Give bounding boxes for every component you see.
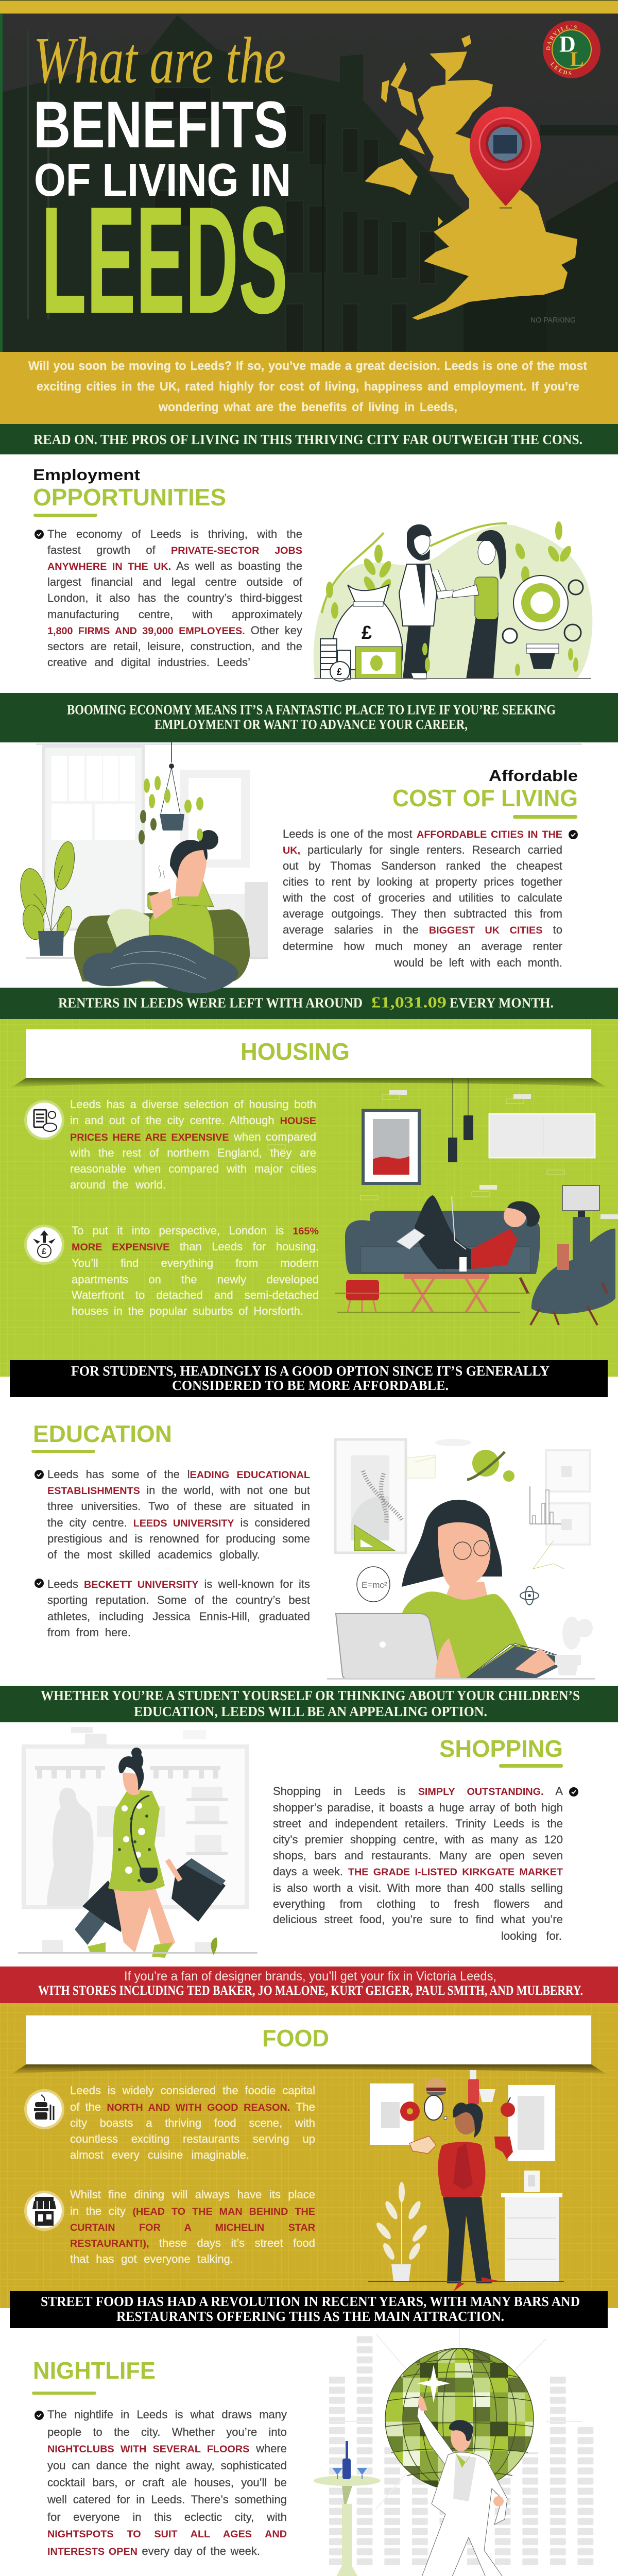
text block: education 1: of the most skilled academics globally. [47, 1548, 260, 1561]
text block: employment: London, it also has the country’s third-biggest [47, 591, 302, 604]
illustration: handshake with money and light bulb [314, 521, 592, 681]
icon: check bullet [35, 1470, 44, 1479]
text block: shopping [273, 1785, 563, 1942]
banner: renters: £1,031.09 [371, 993, 447, 1011]
text block: food 2: that has got everyone talking. [70, 2252, 233, 2265]
text block: housing 2: houses in the popular suburbs of Horsforth. [72, 1304, 303, 1317]
text block: housing 2: MORE EXPENSIVE than Leeds for housing. [72, 1240, 319, 1253]
banner: students: FOR STUDENTS, HEADINGLY IS A GOOD OPTION SINCE IT’S GENERALLY [71, 1363, 550, 1379]
text block: housing 2 [71, 1224, 319, 1317]
text block: employment: creative and digital industries. Leeds’ [47, 656, 250, 669]
text block: food 1: Leeds is widely considered the foodie capital [70, 2084, 315, 2097]
text block: education 1 [47, 1468, 310, 1561]
text block: employment: The economy of Leeds is thriving, with the [47, 528, 302, 540]
text block: education 1: Leeds has some of the lEADING EDUCATIONAL [47, 1468, 310, 1481]
text block: food 2: RESTAURANT!), these days it’s street food [70, 2236, 315, 2249]
icon: check bullet [35, 1579, 44, 1588]
text block: nightlife: The nightlife in Leeds is what draws many [47, 2408, 287, 2421]
text block: education 1: prestigious and is renowned for producing some [47, 1532, 310, 1545]
banner: students: CONSIDERED TO BE MORE AFFORDABLE. [172, 1378, 449, 1393]
banner: renters: RENTERS IN LEEDS WERE LEFT WITH AROUND [58, 995, 363, 1011]
panel: intro: wondering what are the benefits of living in Leeds, [159, 400, 457, 414]
text block: nightlife: well catered for in Leeds. There’s something [47, 2493, 287, 2506]
illustration: woman studying: E=mc² [362, 1580, 387, 1590]
text block: shopping: Shopping in Leeds is SIMPLY OUTSTANDING. A [273, 1785, 563, 1797]
text block: shopping: everything from clothing to fresh flowers and [273, 1897, 563, 1910]
illustration: man with laptop on a sofa [268, 1078, 618, 1325]
text block: nightlife: for everyone in this eclectic city, with [47, 2511, 287, 2523]
text block: food 1 [70, 2084, 315, 2161]
heading box: food [26, 2015, 591, 2064]
banner: street food: STREET FOOD HAS HAD A REVOLUTION IN RECENT YEARS, WITH MANY BARS AND [41, 2294, 580, 2309]
banner: street food: RESTAURANTS OFFERING THIS AS THE MAIN ATTRACTION. [116, 2309, 504, 2324]
heading: COST OF LIVING [392, 785, 578, 811]
panel: intro: exciting cities in the UK, rated highly for cost of living, happiness and employment. If you’re [37, 380, 579, 394]
banner: street food [10, 2291, 608, 2328]
heading: SHOPPING [439, 1735, 563, 1762]
title: what are the benefits of living in Leeds: OF LIVING IN [34, 155, 291, 206]
illustration: woman studying [327, 1439, 595, 1680]
icon: food and drink [24, 2089, 64, 2129]
heading: Affordable [489, 767, 578, 785]
text block: education 2 [47, 1578, 310, 1639]
text block: food 2: in the city (HEAD TO THE MAN BEHIND THE [70, 2205, 315, 2217]
building backdrop: NO PARKING [530, 316, 576, 325]
text block: food 2 [70, 2188, 315, 2265]
text block: employment: largest financial and legal centre outside of [47, 575, 302, 588]
heading [392, 767, 578, 819]
text block: cost of living: average salaries in the BIGGEST UK CITIES to [283, 923, 562, 936]
text block: employment [47, 528, 303, 669]
text block: education 1: ESTABLISHMENTS in the world, with not one but [47, 1484, 310, 1497]
text block: housing 2: You’ll find everything from modern [72, 1257, 319, 1269]
text block: cost of living: Leeds is one of the most AFFORDABLE CITIES IN THE [283, 827, 562, 840]
text block: food 1: almost every cuisine imaginable. [70, 2148, 249, 2161]
banner: read on: READ ON. THE PROS OF LIVING IN THIS THRIVING CITY FAR OUTWEIGH THE CONS. [33, 432, 582, 447]
illustration: man dancing at a disco [314, 2313, 593, 2576]
banner: renters: EVERY MONTH. [450, 995, 554, 1011]
text block: education 1: the city centre. LEEDS UNIVERSITY is considered [47, 1516, 310, 1529]
text block: cost of living: average outgoings. They then subtracted this from [283, 907, 562, 920]
text block: food 2: CURTAIN FOR A MICHELIN STAR [70, 2222, 315, 2233]
text block: nightlife: NIGHTSPOTS TO SUIT ALL AGES AND [47, 2529, 287, 2540]
heading: OPPORTUNITIES [33, 484, 226, 511]
title: what are the benefits of living in Leeds: BENEFITS [33, 88, 288, 162]
heading [32, 2357, 156, 2395]
panel: housing [0, 1019, 618, 1397]
text block: housing 1: reasonable when compared with major cities [70, 1162, 316, 1175]
text block: housing 1: Leeds has a diverse selection of housing both [70, 1098, 316, 1111]
text block: housing 2: To put it into perspective, London is 165% [72, 1224, 319, 1237]
logo: Darvill's Leeds [543, 21, 600, 78]
title: what are the benefits of living in Leeds [33, 24, 291, 345]
text block: employment: fastest growth of PRIVATE-SECTOR JOBS [47, 544, 302, 556]
icon: check bullet [569, 830, 578, 839]
text block: nightlife: cocktail bars, or craft ale houses, you’ll be [47, 2476, 287, 2489]
panel: nightlife [32, 2328, 593, 2576]
text block: shopping: street and independent retailers. Trinity Leeds is the [273, 1817, 563, 1830]
text block: education 1: three universities. Two of these are situated in [47, 1500, 310, 1513]
logo: Darvill's Leeds: D [559, 31, 576, 57]
heading box: housing: HOUSING [241, 1038, 350, 1065]
text block: nightlife: people to the city. Whether you’re into [47, 2426, 287, 2438]
text block: shopping: delicious street food, you’re sure to find what you’re [273, 1913, 563, 1926]
text block: shopping: city’s premier shopping centre, with as many as 120 [273, 1833, 563, 1846]
building backdrop [0, 14, 618, 352]
text block: cost of living: would be left with each month. [394, 956, 562, 969]
logo: Darvill's Leeds: L [570, 47, 584, 71]
text block: nightlife: NIGHTCLUBS WITH SEVERAL FLOORS where [47, 2442, 287, 2455]
icon: check bullet [35, 2411, 44, 2420]
icon: pound with arrows [24, 1225, 64, 1265]
banner: students [10, 1360, 608, 1397]
text block: cost of living: UK, particularly for single renters. Research carried [283, 843, 562, 856]
text block: food 1: of the NORTH AND WITH GOOD REASON. The [70, 2100, 315, 2113]
text block: employment: manufacturing centre, with approximately [47, 608, 302, 620]
panel: education [31, 1420, 595, 1680]
banner: designer brands: If you’re a fan of designer brands, you’ll get your fix in Victoria Leeds, [124, 1969, 496, 1984]
heading box: food: FOOD [262, 2025, 329, 2052]
heading box: housing [26, 1029, 591, 1078]
text block: education 2: sporting reputation. Some of the country’s best [47, 1594, 310, 1606]
heading: EDUCATION [33, 1420, 172, 1447]
panel: employment opportunities [33, 466, 592, 682]
panel: hero [0, 14, 618, 352]
banner: renters [0, 988, 618, 1019]
map of the UK [365, 35, 577, 320]
illustration: handshake with money and light bulb: £ [337, 667, 342, 677]
text block: education 2: from from here. [47, 1626, 131, 1639]
text block: shopping: shopper’s paradise, it boasts a huge array of both high [273, 1801, 563, 1814]
text block: shopping: looking for. [501, 1929, 562, 1942]
panel: affordable cost of living [20, 742, 582, 993]
icon: calculator and piggy bank [24, 1100, 64, 1140]
illustration: hungry person imagining food [368, 2070, 564, 2292]
icon: pound with arrows: £ [42, 1247, 46, 1256]
logo: Darvill's Leeds: LEEDS [550, 62, 572, 75]
text block: food 1: city boasts a thriving food scene, with [70, 2116, 315, 2129]
text block: shopping: days a week. THE GRADE I-LISTED KIRKGATE MARKET [273, 1865, 563, 1878]
banner: education [0, 1686, 618, 1722]
banner: designer brands [0, 1967, 618, 2003]
text block: housing 2: Waterfront to detached and semi-detached [72, 1289, 319, 1301]
text block: housing 1 [70, 1098, 316, 1191]
banner: education: EDUCATION, LEEDS WILL BE AN APPEALING OPTION. [134, 1704, 487, 1719]
title: what are the benefits of living in Leeds: What are the [33, 24, 286, 97]
heading: Employment [33, 466, 140, 484]
icon: check bullet [35, 530, 44, 539]
panel: intro: Will you soon be moving to Leeds? If so, you’ve made a great decision. Leeds is one of the most [28, 359, 587, 373]
text block: education 2: athletes, including Jessica Ennis-Hill, graduated [47, 1610, 310, 1623]
panel: intro [0, 352, 618, 424]
banner: booming economy [0, 693, 618, 742]
text block: cost of living: determine how much money an average renter [283, 940, 562, 952]
illustration: handshake with money and light bulb: £ [362, 622, 372, 643]
heading [33, 466, 226, 517]
text block: housing 1: around the world. [70, 1178, 166, 1191]
text block: nightlife [47, 2408, 287, 2557]
panel: food [0, 2003, 618, 2328]
illustration: woman carrying shopping bags [18, 1727, 258, 1958]
text block: cost of living: with the cost of groceries and utilities to calculate [283, 891, 562, 904]
banner: read on [0, 424, 618, 454]
text block: cost of living [282, 827, 562, 969]
banner: education: WHETHER YOU’RE A STUDENT YOURSELF OR THINKING ABOUT YOUR CHILDREN’S [41, 1688, 580, 1703]
text block: cost of living: cities to rent by looking at property prices together [283, 875, 562, 888]
text block: food 1: countless exciting restaurants serving up [70, 2132, 315, 2145]
panel: shopping [18, 1727, 578, 1958]
text block: cost of living: out by Thomas Sanderson ranked the cheapest [283, 859, 562, 872]
text block: housing 1: in and out of the city centre. Although HOUSE [70, 1114, 316, 1127]
illustration: woman relaxing with a hot drink [17, 742, 582, 993]
text block: housing 1: with the rest of northern England, they are [70, 1146, 316, 1159]
icon: check bullet [569, 1787, 578, 1797]
banner: booming economy: EMPLOYMENT OR WANT TO ADVANCE YOUR CAREER, [154, 717, 468, 732]
logo: Darvill's Leeds: DARVILL'S [546, 25, 577, 50]
text block: employment: 1,800 FIRMS AND 39,000 EMPLOYEES. Other key [47, 624, 302, 637]
map pin marking Leeds [470, 107, 541, 209]
top gold band [0, 0, 618, 14]
text block: employment: ANYWHERE IN THE UK. As well as boasting the [47, 560, 302, 572]
panel: hero: LEEDS [41, 175, 288, 345]
text block: education 2: Leeds BECKETT UNIVERSITY is well-known for its [47, 1578, 310, 1590]
text block: nightlife: you can dance the night away, sophisticated [47, 2459, 287, 2472]
text block: employment: sectors are retail, leisure, construction, and the [47, 640, 302, 653]
text block: shopping: shops, bars and restaurants. Many are open seven [273, 1849, 563, 1862]
text block: housing 2: apartments on the newly developed [72, 1273, 319, 1286]
icon: restaurant front [24, 2191, 64, 2231]
text block: shopping: is also worth a visit. With more than 400 stalls selling [273, 1882, 563, 1894]
text block: food 2: Whilst fine dining will always have its place [70, 2188, 315, 2201]
heading: NIGHTLIFE [33, 2357, 156, 2384]
text block: nightlife: INTERESTS OPEN every day of the week. [47, 2545, 260, 2557]
text block: housing 1: PRICES HERE ARE EXPENSIVE when compared [70, 1130, 316, 1143]
